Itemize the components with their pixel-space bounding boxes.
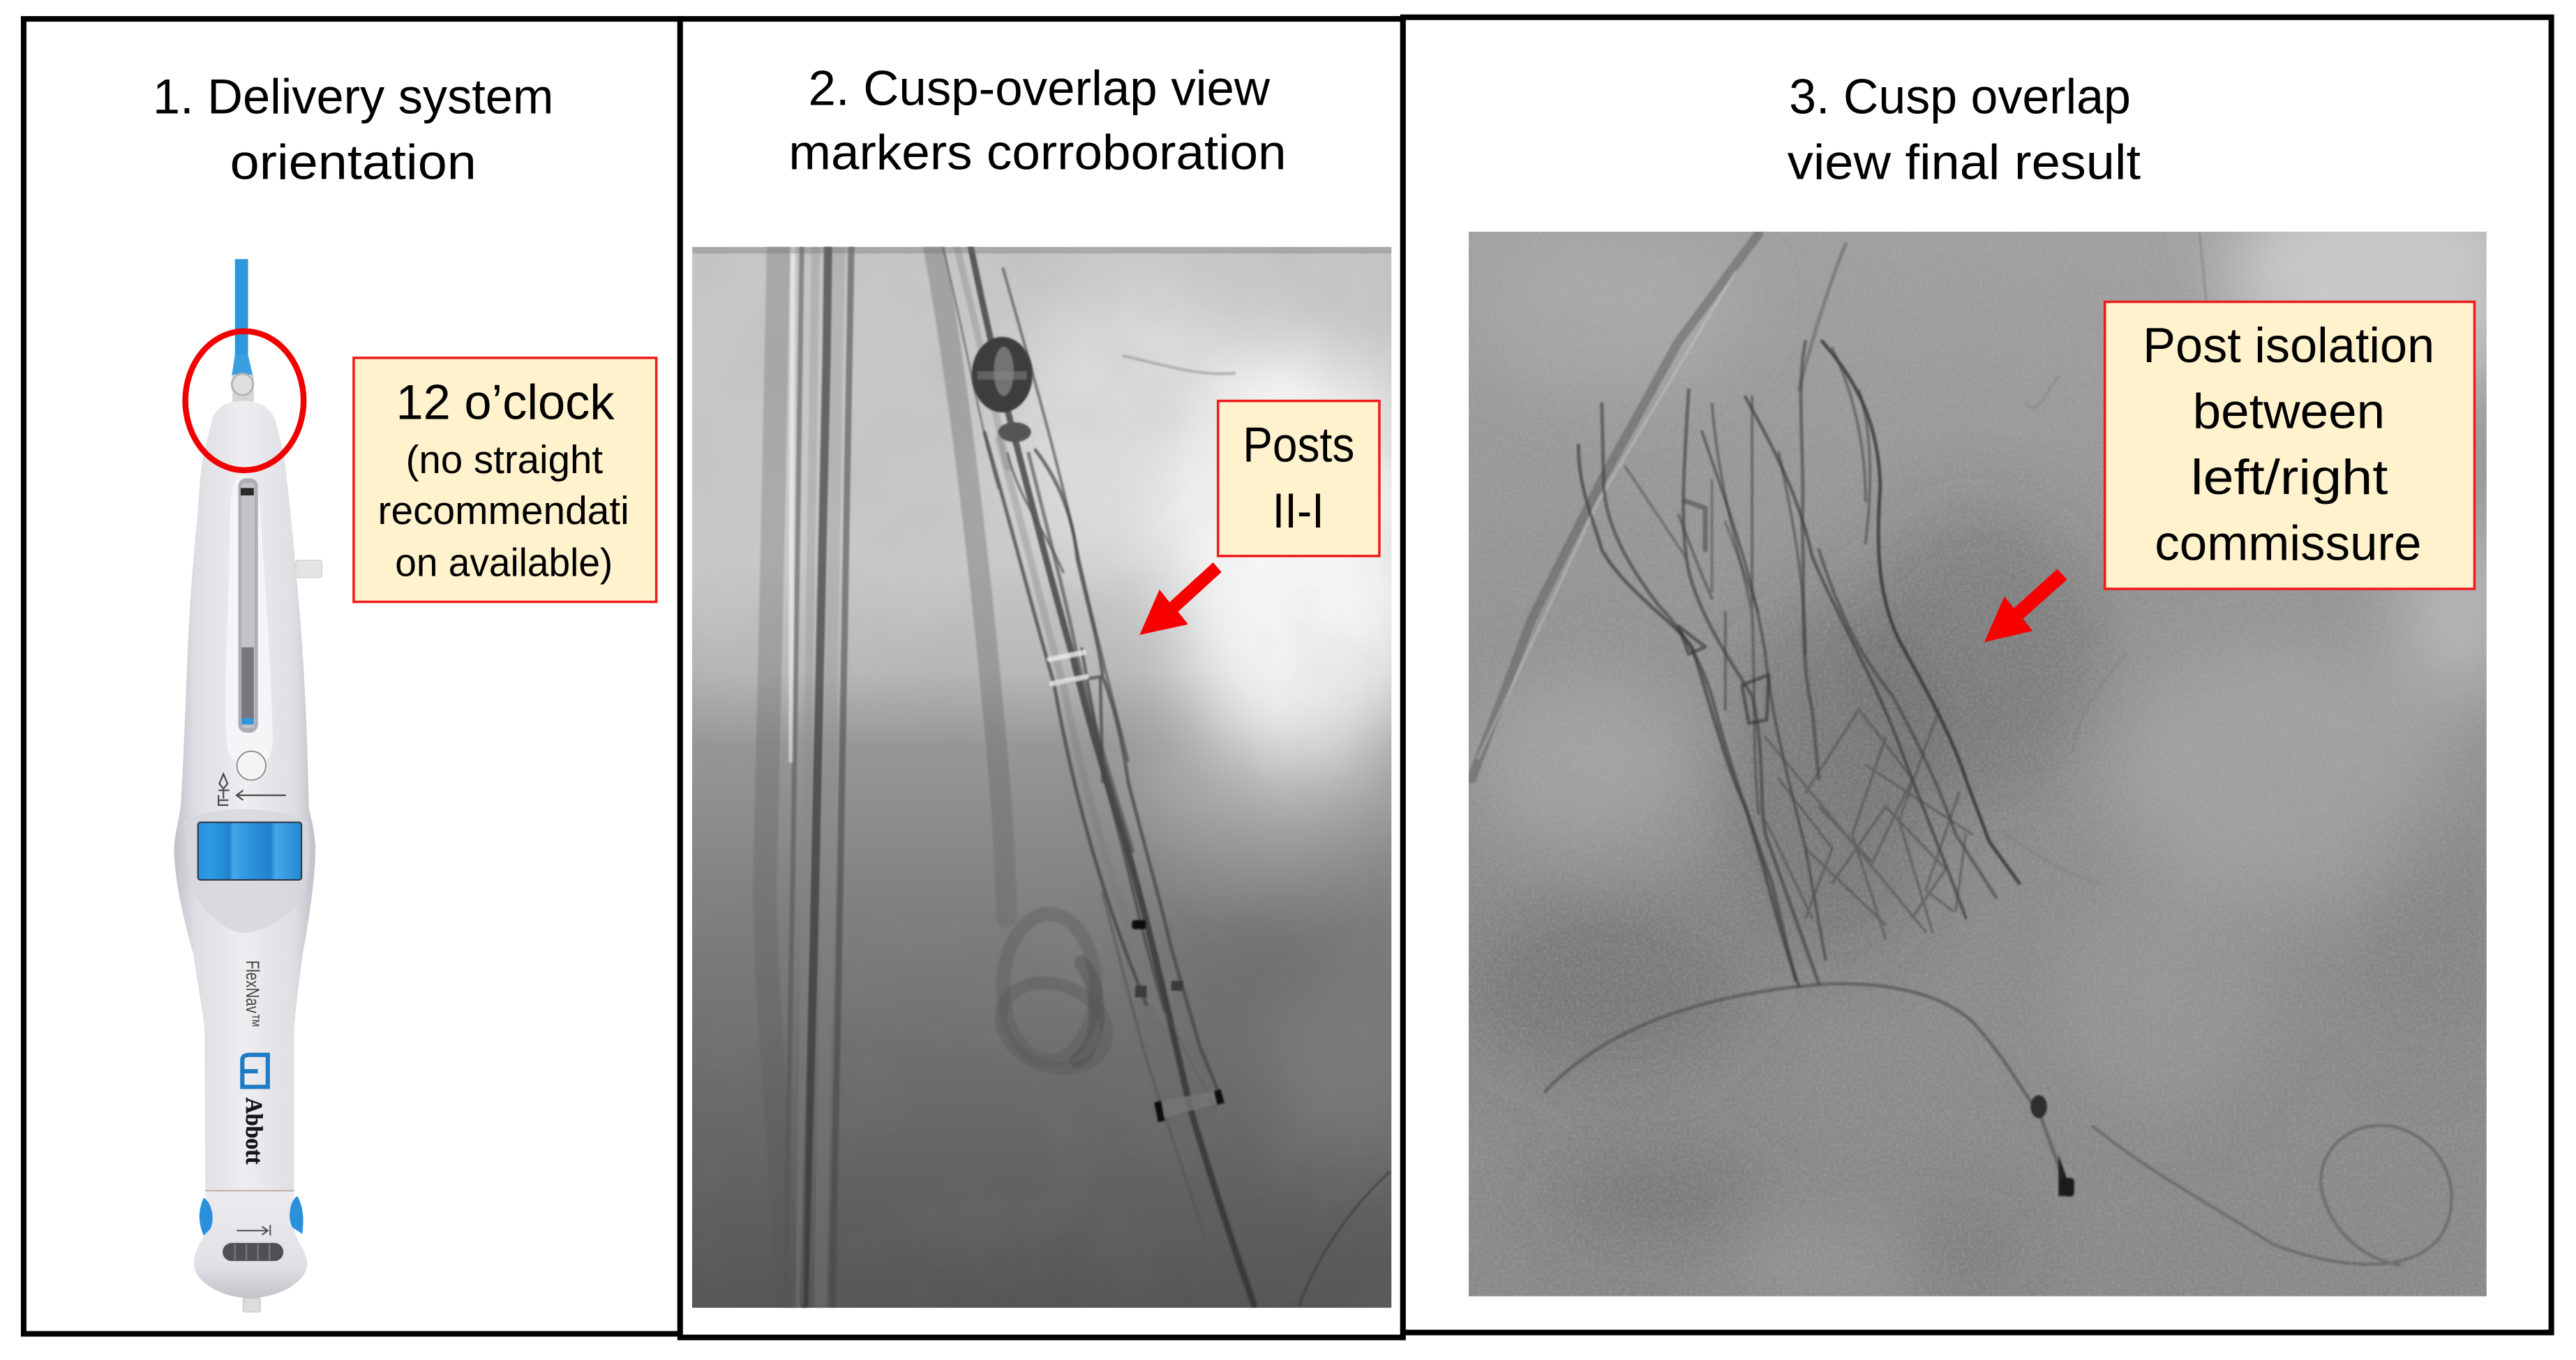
blue guide tube — [235, 259, 248, 361]
catheter lines — [765, 247, 1389, 1305]
fluoroscopy image: delivery catheter with markers — [692, 247, 1434, 1308]
handle cap — [194, 1191, 307, 1298]
panel 2 frame — [680, 19, 1403, 1338]
Abbott logo mark — [242, 1055, 268, 1087]
panel 1 heading — [153, 68, 553, 190]
red arrow to frame — [1984, 569, 2067, 642]
callout: Posts II-I — [1218, 401, 1379, 556]
panel 1 heading: 1. Delivery system — [153, 68, 553, 124]
panel 2 heading: markers corroboration — [788, 125, 1287, 180]
panel 3 heading — [1788, 68, 2141, 190]
radiopaque markers — [972, 337, 1224, 1122]
callout: post isolation: between — [2193, 384, 2385, 439]
callout: 12 o'clock: on available) — [395, 540, 613, 584]
lock symbol and arrow — [218, 774, 286, 805]
side port — [296, 560, 322, 578]
callout: 12 o'clock: recommendati — [378, 488, 629, 532]
red highlight ellipse — [186, 331, 304, 470]
panel 2: cusp-overlap view markers corroboration — [680, 19, 1434, 1338]
panel 1: delivery system orientation — [24, 19, 680, 1333]
catheter, stent frame and guidewire lines — [1472, 234, 2452, 1265]
panel 1 heading: orientation — [230, 135, 477, 190]
button — [237, 752, 266, 780]
panel 3 heading: view final result — [1788, 135, 2141, 190]
callout: post isolation: left/right — [2191, 449, 2388, 505]
callout: 12 o'clock: 12 o’clock — [396, 374, 615, 429]
end knob with arrow — [237, 1225, 270, 1236]
callout: 12 o'clock: (no straight — [406, 438, 603, 481]
icon: FlexNav delivery system handle — [174, 259, 322, 1312]
panel 3 heading: 3. Cusp overlap — [1789, 68, 2131, 124]
callout: post isolation — [2105, 302, 2474, 589]
FlexNav label: FlexNav™ — [242, 960, 264, 1028]
panel 1 frame — [24, 19, 680, 1333]
panel 2 heading: 2. Cusp-overlap view — [808, 61, 1271, 116]
callout: post isolation: Post isolation — [2143, 317, 2434, 373]
callout: 12 o'clock — [354, 358, 657, 602]
red arrow to posts — [1139, 562, 1222, 635]
callout: Posts II-I: Posts — [1243, 417, 1354, 472]
handle body — [174, 401, 315, 1191]
fluoroscopy image: deployed valve frame — [1469, 232, 2487, 1297]
panel 2 heading — [788, 61, 1287, 180]
blue deflection wheel — [184, 809, 310, 933]
blue side tabs — [200, 1198, 213, 1236]
slot recess — [225, 474, 273, 765]
luer nozzle — [243, 1298, 260, 1312]
valve markers — [2030, 1095, 2074, 1196]
panel 3: cusp overlap view final result — [1403, 17, 2552, 1333]
callout: post isolation: commissure — [2155, 516, 2422, 571]
panel 3 frame — [1403, 17, 2552, 1333]
callout: Posts II-I: II-I — [1273, 483, 1324, 538]
Abbott wordmark: Abbott — [241, 1098, 267, 1165]
